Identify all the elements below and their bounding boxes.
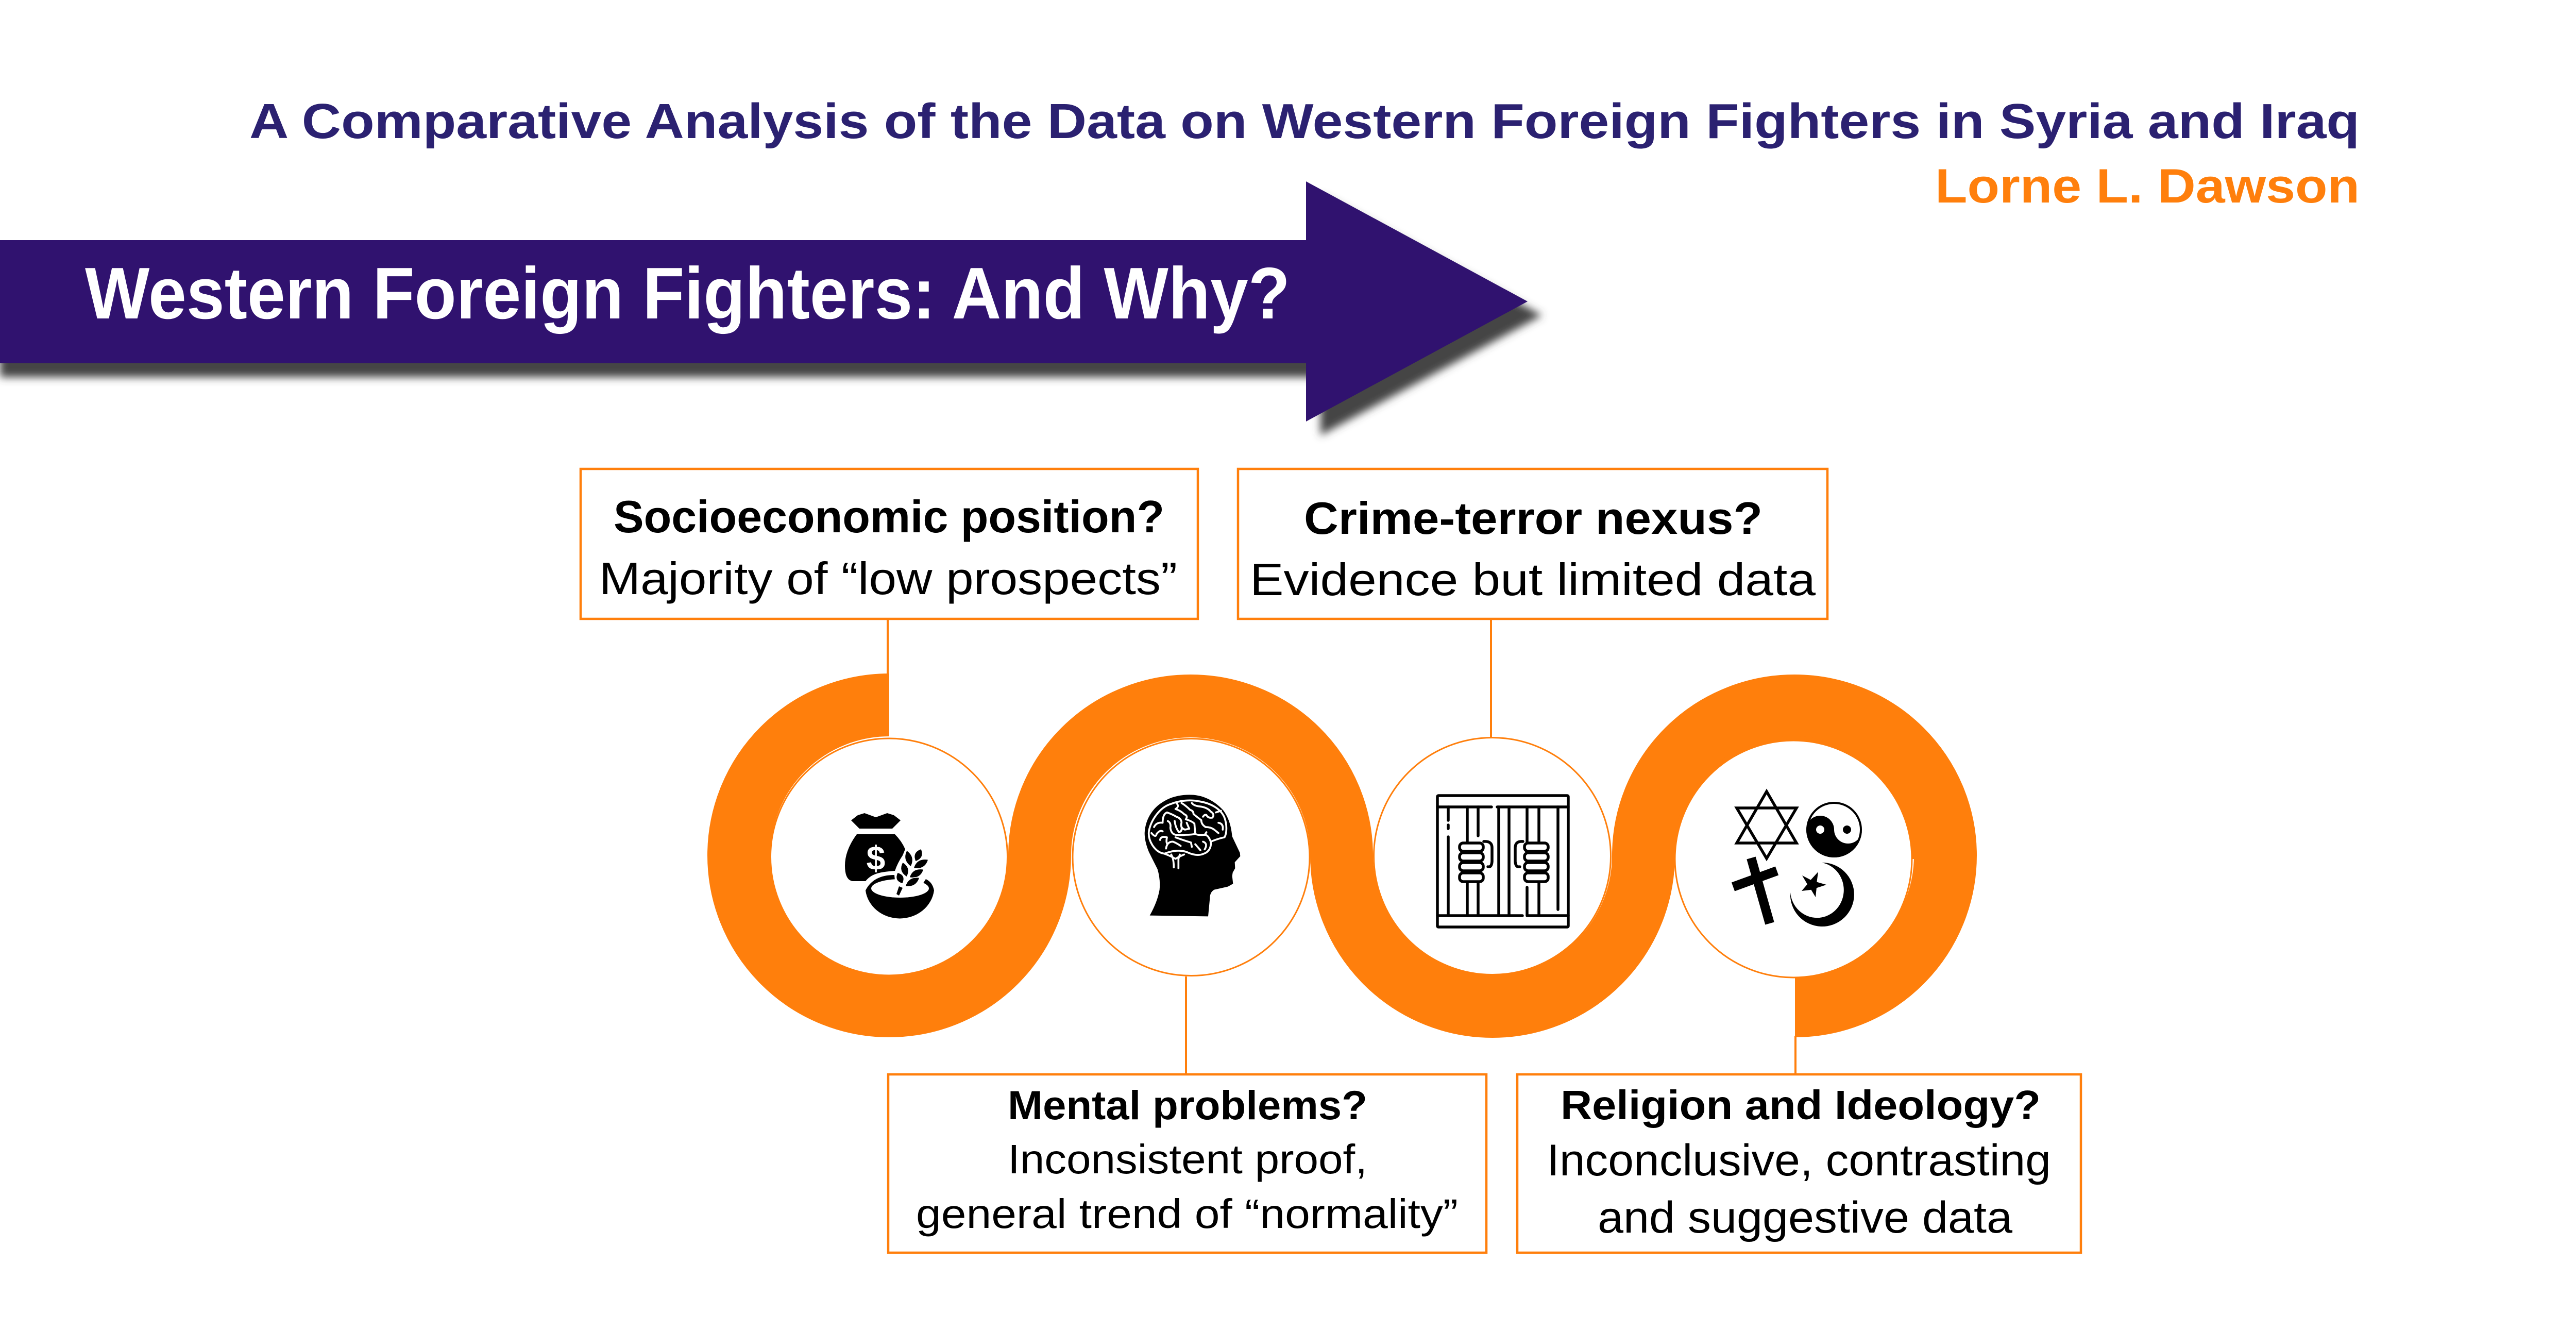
circle: crime [1374,738,1611,975]
author: Lorne L. Dawson [1935,159,2360,213]
serpentine ribbon [739,705,1945,1006]
ribbon inner filler: religion arc [1675,740,1913,859]
panel: mental problems: general trend of “normality” [916,1191,1458,1237]
cross [1733,858,1777,923]
circle: mental [1073,739,1310,976]
yin yang [1806,803,1862,857]
circle: religion [1675,740,1912,978]
arrow banner [0,181,1542,435]
panel: religion and ideology: Religion and Ideology? [1561,1082,2041,1128]
panel: crime-terror nexus: Evidence but limited data [1250,554,1816,605]
panel: socioeconomic position: Socioeconomic position? [614,491,1164,542]
circle: socioeconomic [771,738,1008,975]
panel: religion and ideology: and suggestive data [1598,1193,2012,1242]
panel: socioeconomic position: Majority of “low prospects” [599,553,1177,604]
icon: money bag and grain bowl [845,813,934,918]
panel: mental problems: Mental problems? [1008,1082,1367,1128]
panel: religion and ideology: Inconclusive, contrasting [1547,1136,2051,1185]
title: A Comparative Analysis of the Data on Western Foreign Fighters in Syria and Iraq [249,94,2360,149]
panel: mental problems: Inconsistent proof, [1008,1136,1367,1182]
icon: money bag and grain bowl: $ [867,839,885,877]
icon: hands on prison bars [1437,796,1568,927]
panel: religion and ideology [1517,1074,2081,1253]
star of david [1737,791,1797,858]
arrow heading: Western Foreign Fighters: And Why? [85,252,1290,334]
connector lines [888,620,1795,1074]
panel: socioeconomic position [581,469,1198,619]
icon: head with brain [1145,795,1240,916]
panel: mental problems [888,1074,1486,1253]
panel: crime-terror nexus [1238,469,1827,619]
crescent and star [1790,863,1854,926]
panel: crime-terror nexus: Crime-terror nexus? [1304,493,1762,544]
icon: religious symbols [1733,791,1862,926]
